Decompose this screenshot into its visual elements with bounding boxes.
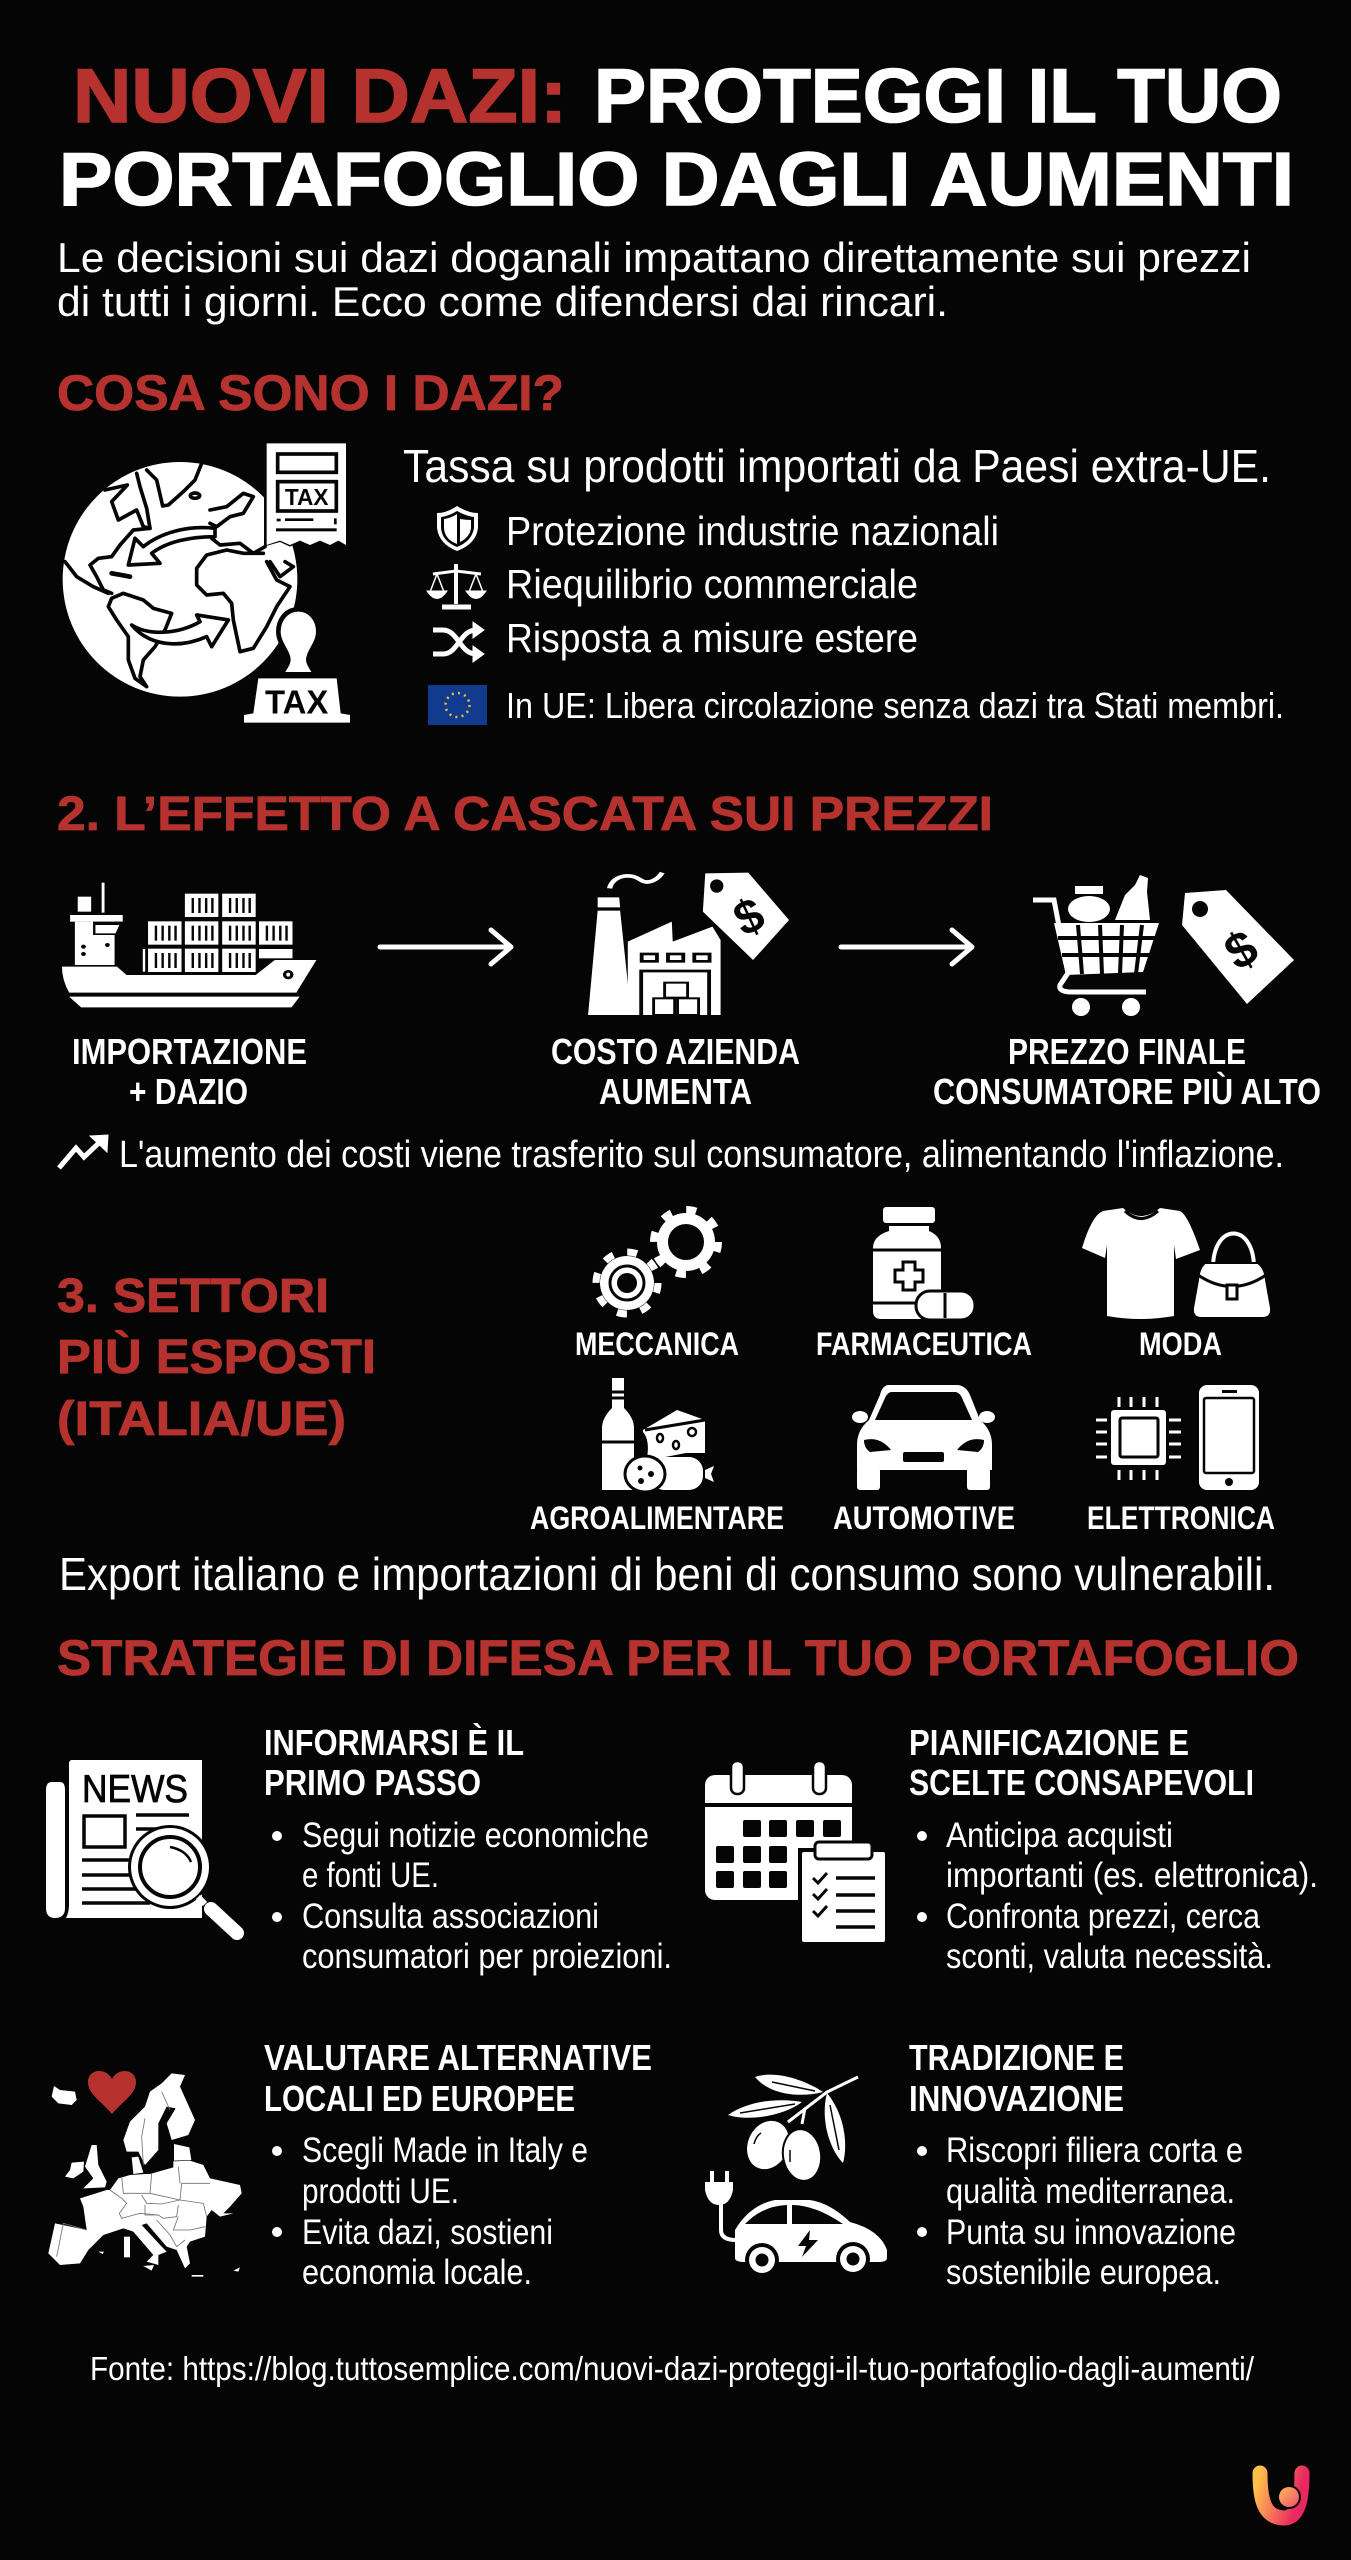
bullets: tradizione: sostenibile europea. [946,2253,1221,2292]
icon: scales [429,564,484,607]
panel: alternative [48,2037,652,2292]
subtitle: Le decisioni sui dazi doganali impattano direttamente sui prezzi [57,234,1251,281]
icon: factory with price tag [588,873,789,1015]
arrow [841,930,972,964]
bullets: informarsi: e fonti UE. [302,1856,439,1895]
bullets: informarsi: consumatori per proiezioni. [302,1937,672,1976]
bullets: tradizione: Punta su innovazione [946,2213,1236,2252]
icon: shopping cart with price tag: $ [1215,919,1267,981]
title: PORTAFOGLIO DAGLI AUMENTI [59,137,1294,221]
heading: pianificazione [909,1722,1254,1803]
bullets: pianificazione: Anticipa acquisti [946,1816,1173,1855]
icon: wine, cheese and salami [602,1378,714,1492]
icon: container ship [62,883,316,1007]
bullets: informarsi: Consulta associazioni [302,1897,599,1936]
subtitle: di tutti i giorni. Ecco come difendersi dai rincari. [57,278,948,325]
heading: pianificazione: SCELTE CONSAPEVOLI [909,1762,1254,1803]
label: farmaceutica: FARMACEUTICA [816,1326,1032,1362]
panel: pianificazione [705,1722,1318,1976]
title: NUOVI DAZI: [73,54,567,139]
icon: shuffle [433,622,484,662]
heading: settori: (ITALIA/UE) [57,1393,346,1446]
icon: map of Europe with heart [48,2071,242,2277]
label: costo azienda: AUMENTA [599,1071,752,1112]
icon: logo [1260,2473,1302,2518]
icon: calendar and checklist [705,1761,889,1946]
label: moda: MODA [1139,1326,1222,1362]
subtitle [57,234,1251,325]
heading: tradizione [909,2037,1124,2119]
text: risposta: Risposta a misure estere [506,615,918,661]
label: importazione: IMPORTAZIONE [72,1031,307,1072]
icon: olive branch and electric car [705,2075,887,2277]
icon: newspaper with magnifier [46,1760,237,1933]
title: PROTEGGI IL TUO [594,54,1282,139]
icon: EU flag [428,685,487,725]
icon: gears [596,1210,718,1314]
heading: alternative: LOCALI ED EUROPEE [264,2078,575,2119]
bullets: pianificazione [917,1816,1318,1976]
bullets: informarsi: Segui notizie economiche [302,1816,649,1855]
heading: tradizione: INNOVAZIONE [909,2078,1124,2119]
label: costo azienda [551,1031,800,1112]
bullets: alternative: Evita dazi, sostieni [302,2213,553,2252]
heading: settori: 3. SETTORI [57,1270,329,1323]
text: in UE: In UE: Libera circolazione senza dazi tra Stati membri. [506,685,1284,726]
bullets: tradizione: qualità mediterranea. [946,2172,1235,2211]
icon: heart [88,2071,136,2114]
heading: tradizione: TRADIZIONE E [909,2037,1124,2078]
source line: Fonte: https://blog.tuttosemplice.com/nuovi-dazi-proteggi-il-tuo-portafoglio-dagli-aumenti/ [90,2350,1255,2387]
icon: shield [437,506,478,551]
panel: informarsi [46,1722,672,1976]
bullets: tradizione: Riscopri filiera corta e [946,2131,1243,2170]
panel: tradizione [705,2037,1243,2292]
icon: globe with tax receipt and stamp: TAX [285,484,328,510]
heading: informarsi [264,1722,524,1803]
label: prezzo finale [933,1031,1321,1112]
heading: cosa sono i dazi: COSA SONO I DAZI? [57,365,564,421]
label: meccanica: MECCANICA [575,1326,739,1362]
icon: globe with tax receipt and stamp [63,441,350,723]
bullets: tradizione [917,2131,1243,2292]
icon: t-shirt and handbag [1082,1208,1271,1319]
icon: medicine bottle [873,1207,975,1320]
heading: informarsi: INFORMARSI È IL [264,1722,524,1763]
label: prezzo finale: PREZZO FINALE [1008,1031,1246,1072]
icon: newspaper with magnifier: NEWS [82,1768,188,1811]
bullets: alternative: Scegli Made in Italy e [302,2131,588,2170]
heading: strategie: STRATEGIE DI DIFESA PER IL TUO PORTAFOGLIO [57,1630,1299,1686]
icon: car front [852,1385,995,1490]
heading: effetto a cascata: 2. L’EFFETTO A CASCATA SUI PREZZI [57,788,993,841]
label: agroalimentare: AGROALIMENTARE [530,1500,784,1536]
label: automotive: AUTOMOTIVE [833,1500,1015,1536]
icon: rising trend [59,1135,108,1168]
bullets: alternative: economia locale. [302,2253,532,2292]
heading: alternative: VALUTARE ALTERNATIVE [264,2037,652,2078]
title [59,54,1294,221]
bullets: alternative [272,2131,588,2292]
icon: globe with tax receipt and stamp: TAX [265,684,328,721]
heading: settori [57,1270,376,1446]
heading: informarsi: PRIMO PASSO [264,1762,481,1803]
bullets: pianificazione: Confronta prezzi, cerca [946,1897,1260,1936]
heading: pianificazione: PIANIFICAZIONE E [909,1722,1189,1763]
label: elettronica: ELETTRONICA [1087,1500,1275,1536]
text: protezione: Protezione industrie nazionali [506,508,999,554]
heading: settori: PIÙ ESPOSTI [57,1329,376,1384]
icon: factory with price tag: $ [726,888,773,947]
arrow [380,930,511,964]
label: costo azienda: COSTO AZIENDA [551,1031,800,1072]
bullets: informarsi [272,1816,672,1976]
icon: chip and smartphone [1096,1385,1259,1490]
bullets: pianificazione: sconti, valuta necessità. [946,1937,1273,1976]
icon: shopping cart with price tag [1033,875,1294,1016]
label: importazione: + DAZIO [129,1071,248,1112]
bullets: alternative: prodotti UE. [302,2172,459,2211]
bullets: pianificazione: importanti (es. elettronica). [946,1856,1318,1895]
text: definition: Tassa su prodotti importati da Paesi extra-UE. [403,440,1271,492]
heading: alternative [264,2037,652,2119]
text: riequilibrio: Riequilibrio commerciale [506,561,918,607]
label: importazione [72,1031,307,1112]
